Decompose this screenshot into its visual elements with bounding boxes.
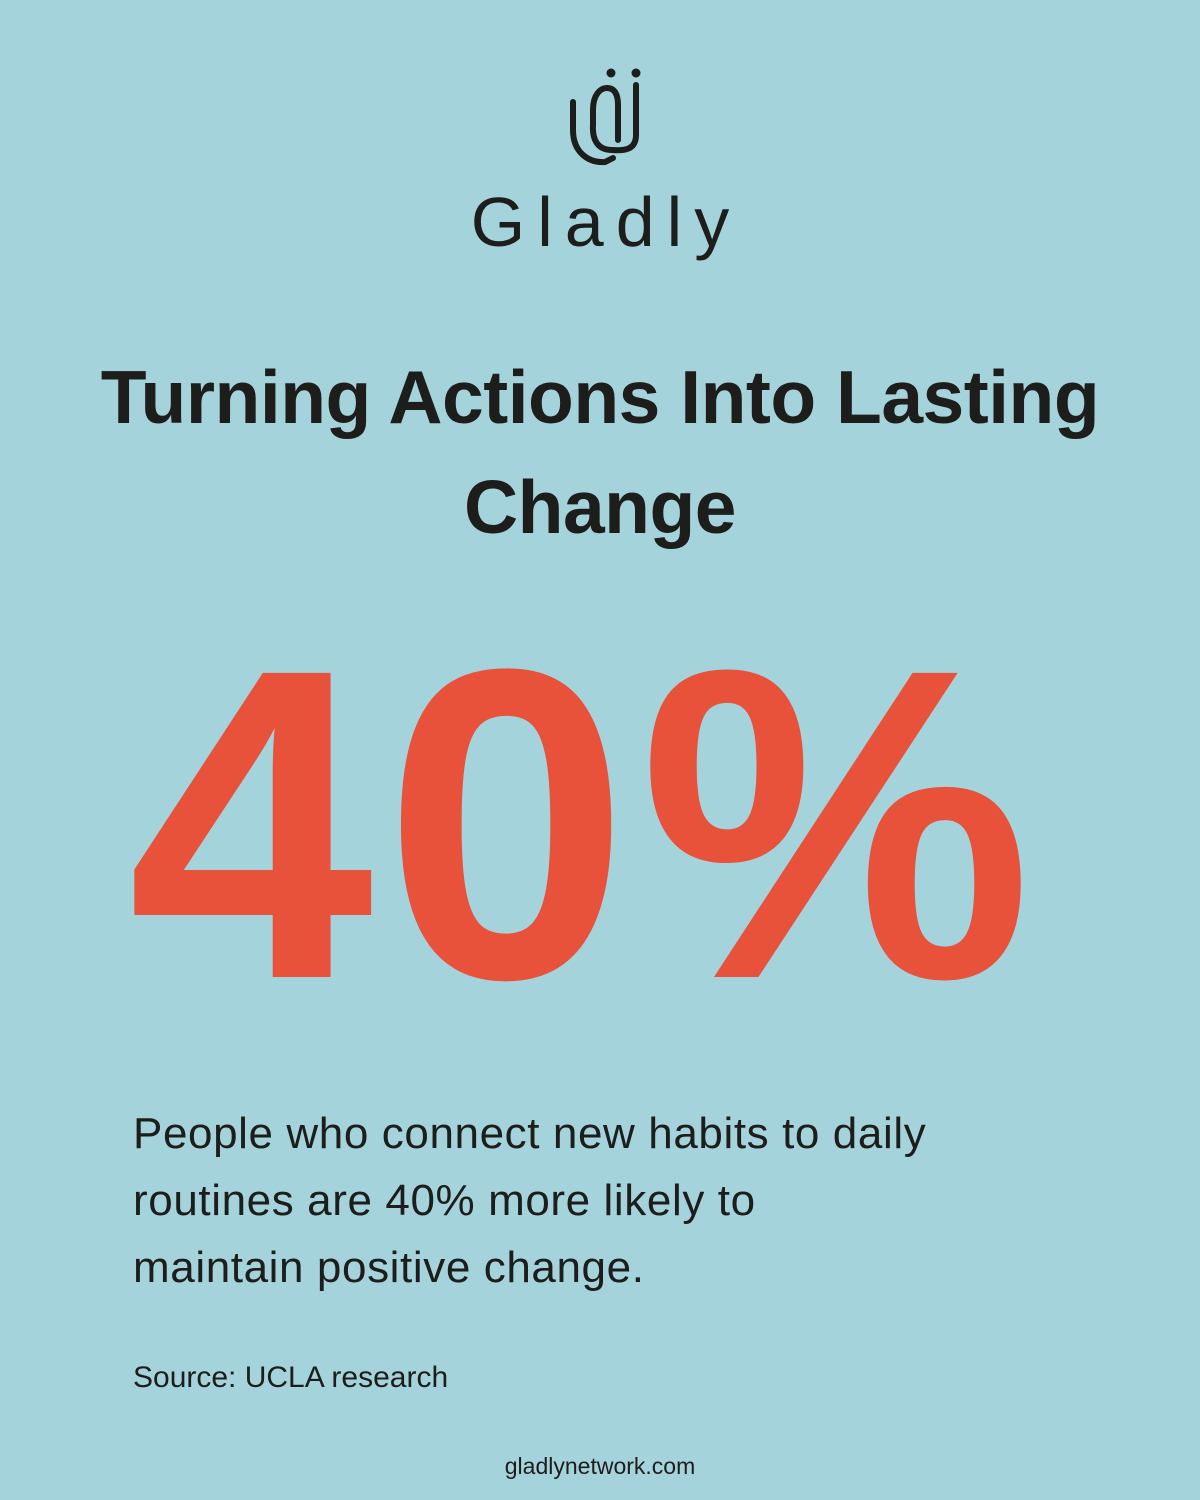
title: Turning Actions Into Lasting <box>101 355 1099 439</box>
big statistic: 40% <box>128 577 1042 1071</box>
description: People who connect new habits to daily <box>133 1109 926 1158</box>
logo wordmark: Gladly <box>471 183 741 261</box>
description: routines are 40% more likely to <box>133 1176 756 1225</box>
title: Change <box>464 465 736 549</box>
title <box>101 355 1099 549</box>
description <box>133 1109 926 1292</box>
footer url: gladlynetwork.com <box>505 1453 695 1479</box>
description: maintain positive change. <box>133 1243 645 1292</box>
source: Source: UCLA research <box>133 1361 448 1394</box>
logo icon <box>570 68 640 166</box>
